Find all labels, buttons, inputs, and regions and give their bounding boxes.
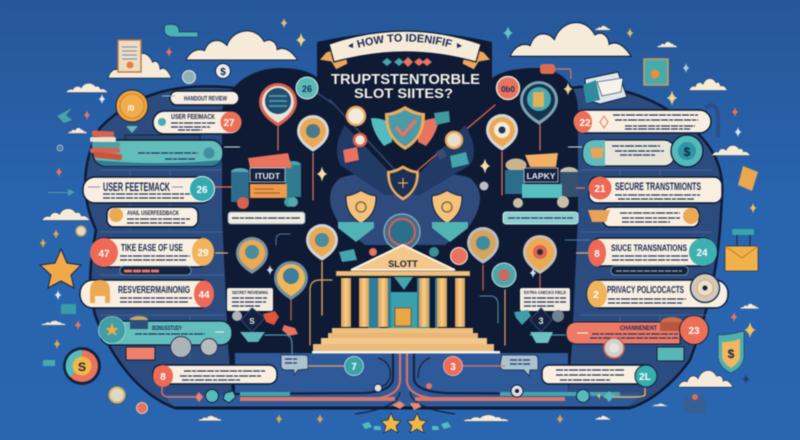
number circle 7 left lower: 7 xyxy=(351,362,357,373)
stars at bottom xyxy=(362,413,451,433)
icon: winged shield xyxy=(371,106,439,150)
icon: dollar shield: $ xyxy=(728,347,735,361)
icon: left gold shield xyxy=(346,190,376,224)
cloud: small left xyxy=(66,83,108,93)
connector and icons lower right xyxy=(576,388,645,402)
icon: dollar shield xyxy=(718,331,744,373)
main title xyxy=(331,71,480,101)
pill: teal with chips xyxy=(90,130,240,166)
pin: coin stack, left upper xyxy=(259,83,297,127)
panel grid xyxy=(100,170,712,360)
pill: suice transnations: 8 xyxy=(594,249,600,260)
icon: document tag xyxy=(738,166,758,191)
pill: user feedback 26 xyxy=(83,176,232,203)
icon: teal coin top xyxy=(182,70,196,84)
temple label: SLOTT xyxy=(388,259,418,269)
pill: reserve: 44 xyxy=(198,290,210,301)
icon: documents top right xyxy=(583,72,627,104)
teal box right xyxy=(657,347,684,361)
pill: privacy: PRIVACY POLICOCACTS xyxy=(607,285,684,296)
pill: teal with star: BONUSSTUDY xyxy=(152,326,182,332)
pill: ease of use: 29 xyxy=(197,248,209,259)
coin icons xyxy=(170,336,218,358)
chips xyxy=(90,130,122,160)
icon: coin xyxy=(110,388,124,402)
temple xyxy=(312,245,500,354)
pill: left 1 xyxy=(162,91,239,105)
icon: orange medal: /0 xyxy=(128,104,135,113)
pill: secure transmiints: SECURE TRANSTMIONTS xyxy=(615,181,701,193)
cloud: tiny right xyxy=(657,42,677,47)
dark centre panel xyxy=(222,68,578,393)
pill: ease of use xyxy=(90,238,228,267)
text strip centre left xyxy=(228,212,305,224)
icon: gold star xyxy=(40,249,81,288)
roots and lower connector curves xyxy=(235,353,568,414)
pill: ease of use: 47 xyxy=(98,249,110,260)
small medals lower band xyxy=(374,383,523,410)
icon: certificate xyxy=(118,40,141,72)
note card left xyxy=(227,288,273,311)
cloud: lower right xyxy=(678,370,733,387)
cloud: bottom centre left xyxy=(198,416,222,421)
pill: left 5 xyxy=(107,207,198,227)
icon: S ring: S xyxy=(78,360,86,374)
icon: 3 shield and hearts: 3 xyxy=(538,316,544,326)
pill: privacy xyxy=(587,274,728,308)
pack label: LAPKY xyxy=(527,171,556,181)
badge right coral xyxy=(496,76,520,100)
lower centre band xyxy=(165,353,640,408)
cloud: top centre left xyxy=(186,31,298,60)
central blue lobes behind shields xyxy=(330,174,480,245)
icon: lower right gift xyxy=(684,394,705,413)
lower band: left ribbon xyxy=(240,397,395,401)
medal right lower xyxy=(604,338,624,358)
note card left: SECRET REVIEWING xyxy=(232,290,268,295)
strip left xyxy=(120,266,191,275)
pill: 8: 8 xyxy=(160,372,166,383)
pill: 2L xyxy=(542,365,657,387)
cloud: tiny lower right xyxy=(740,304,759,309)
pin: far left lower xyxy=(236,237,268,274)
note card right: EXTRA CHECKS FIELD xyxy=(524,290,567,295)
pill: coral 23 xyxy=(566,316,708,344)
right speech bubble xyxy=(500,355,538,376)
pin: lower left xyxy=(306,224,338,261)
badge 26: 26 xyxy=(302,84,312,94)
pill: reserve: RESVERERMAINONIG xyxy=(118,285,190,296)
icon: right gold shield xyxy=(432,190,462,224)
pill: left 5: AVAIL USERFEEDBACK xyxy=(127,211,180,217)
cloud: small top right xyxy=(595,26,611,30)
cloud: bottom right xyxy=(595,416,611,420)
text strip centre right xyxy=(503,212,578,224)
cloud: right xyxy=(689,79,727,90)
pill: user feedback 26: USER FEETEMACK xyxy=(103,180,170,194)
icon: teal chevron xyxy=(57,108,72,123)
small medal icons xyxy=(284,107,488,264)
pill: suice transnations xyxy=(576,238,717,266)
pack: ITUDT folder and coins xyxy=(231,153,301,209)
pill: right 22: 22 xyxy=(579,118,591,129)
pill: right teal $ xyxy=(568,135,703,167)
lower band teal strips xyxy=(240,392,620,396)
connector and hexagons lower left xyxy=(162,387,236,403)
arrow: teal left xyxy=(48,189,75,196)
pill: privacy: 2 xyxy=(593,290,599,301)
left speech bubble xyxy=(281,355,308,375)
banner heading: HOW TO IDENIFIF xyxy=(356,33,453,48)
number circle 7 left lower xyxy=(308,356,364,376)
icon: orange medal xyxy=(116,90,148,133)
pill: user feedback 26: 26 xyxy=(196,185,208,196)
panel bottom edge xyxy=(175,406,630,410)
pill: coral 23: 23 xyxy=(688,326,700,337)
cloud: right mid xyxy=(712,145,750,156)
cloud: bottom strip left xyxy=(41,321,66,325)
circle ornament left xyxy=(76,226,86,236)
icon: central shield xyxy=(387,165,419,201)
pill: 2L: 2L xyxy=(639,372,651,383)
note card right xyxy=(520,288,570,311)
icon: coral coin xyxy=(136,402,148,414)
coral box xyxy=(126,347,155,360)
pin: orange, right xyxy=(486,114,518,151)
icon: teal key tag xyxy=(164,24,198,37)
pill: suice transnations: SIUCE TRANSNATIONS xyxy=(611,243,687,254)
badge 26 xyxy=(296,77,318,99)
pill: suice transnations: 24 xyxy=(696,248,708,259)
lower band: right ribbon xyxy=(415,397,565,401)
icon: teal shields below xyxy=(338,222,468,242)
pill: secure transmiints: 21 xyxy=(594,184,606,195)
icon: arch pipe right xyxy=(705,105,718,137)
pill: 8 xyxy=(153,365,277,387)
icon: dollar coin top: $ xyxy=(220,67,226,78)
sparkles centre xyxy=(266,158,536,281)
pill: teal with star xyxy=(98,316,232,345)
pack: LAPKY folder and coins xyxy=(505,153,578,208)
main title: SLOT SIITES? xyxy=(354,85,453,101)
cloud: bottom centre xyxy=(463,415,510,421)
pill: secure transmiints xyxy=(576,176,722,203)
pill: coral 23: CHANNENENT xyxy=(620,326,657,332)
icon: S shield and hearts: S xyxy=(249,317,255,326)
banner ornaments xyxy=(348,43,462,48)
pill: left 1: HANDOUT REVIEW xyxy=(184,96,228,102)
pill: user feedback 27: USER FEEIMACK xyxy=(171,112,215,121)
icon: 3 shield and hearts xyxy=(514,308,564,343)
cloud: top centre right xyxy=(510,23,631,56)
icon: teal envelope xyxy=(61,304,76,314)
pill: ease of use: TIKE EASE OF USE xyxy=(121,242,183,254)
pin: yellow xyxy=(274,261,308,300)
connector lines: centre xyxy=(265,88,590,355)
icon: central dial xyxy=(384,214,420,250)
cloud: top left with certificate xyxy=(108,53,172,78)
pill: right 4 xyxy=(588,207,699,227)
main title: TRUPTSTENTORBLE xyxy=(331,71,480,88)
title banner xyxy=(320,30,490,70)
cloud: far bottom xyxy=(652,403,668,406)
cloud: bottom left edge xyxy=(42,209,90,220)
icon: S ring xyxy=(63,347,101,385)
main panel: blue rounded body xyxy=(85,86,722,408)
pill: right teal $: $ xyxy=(684,145,691,159)
pill: reserve xyxy=(80,280,214,308)
small envelopes xyxy=(339,111,469,262)
pin: orange, left xyxy=(297,115,329,152)
pin: teal, right upper xyxy=(520,81,558,125)
icon: teal tag xyxy=(43,360,55,366)
pill: user feedback 27: 27 xyxy=(223,118,235,129)
pin: right lower grey xyxy=(467,227,499,264)
strip right xyxy=(611,266,688,275)
pill: user feedback 27 xyxy=(153,111,242,134)
number circle 3 right lower xyxy=(444,356,505,376)
title backing shape xyxy=(317,32,492,130)
pin: right lower orange xyxy=(523,235,557,274)
icon: framed picture xyxy=(644,59,668,85)
number circle 3 right lower: 3 xyxy=(450,362,456,373)
cloud: tiny left xyxy=(68,128,87,133)
icon: S shield and hearts xyxy=(232,308,298,342)
icon: orange gate xyxy=(90,280,110,303)
badge teal lower xyxy=(492,263,516,287)
icon: small ring xyxy=(57,145,63,151)
icon: coral pipe xyxy=(540,64,571,79)
badge right coral: 0b0 xyxy=(501,85,515,94)
pill: right 22 xyxy=(573,110,711,133)
icon: briefcase xyxy=(725,229,758,271)
pack label: ITUDT xyxy=(255,171,281,181)
icon: dollar coin top xyxy=(216,64,230,78)
